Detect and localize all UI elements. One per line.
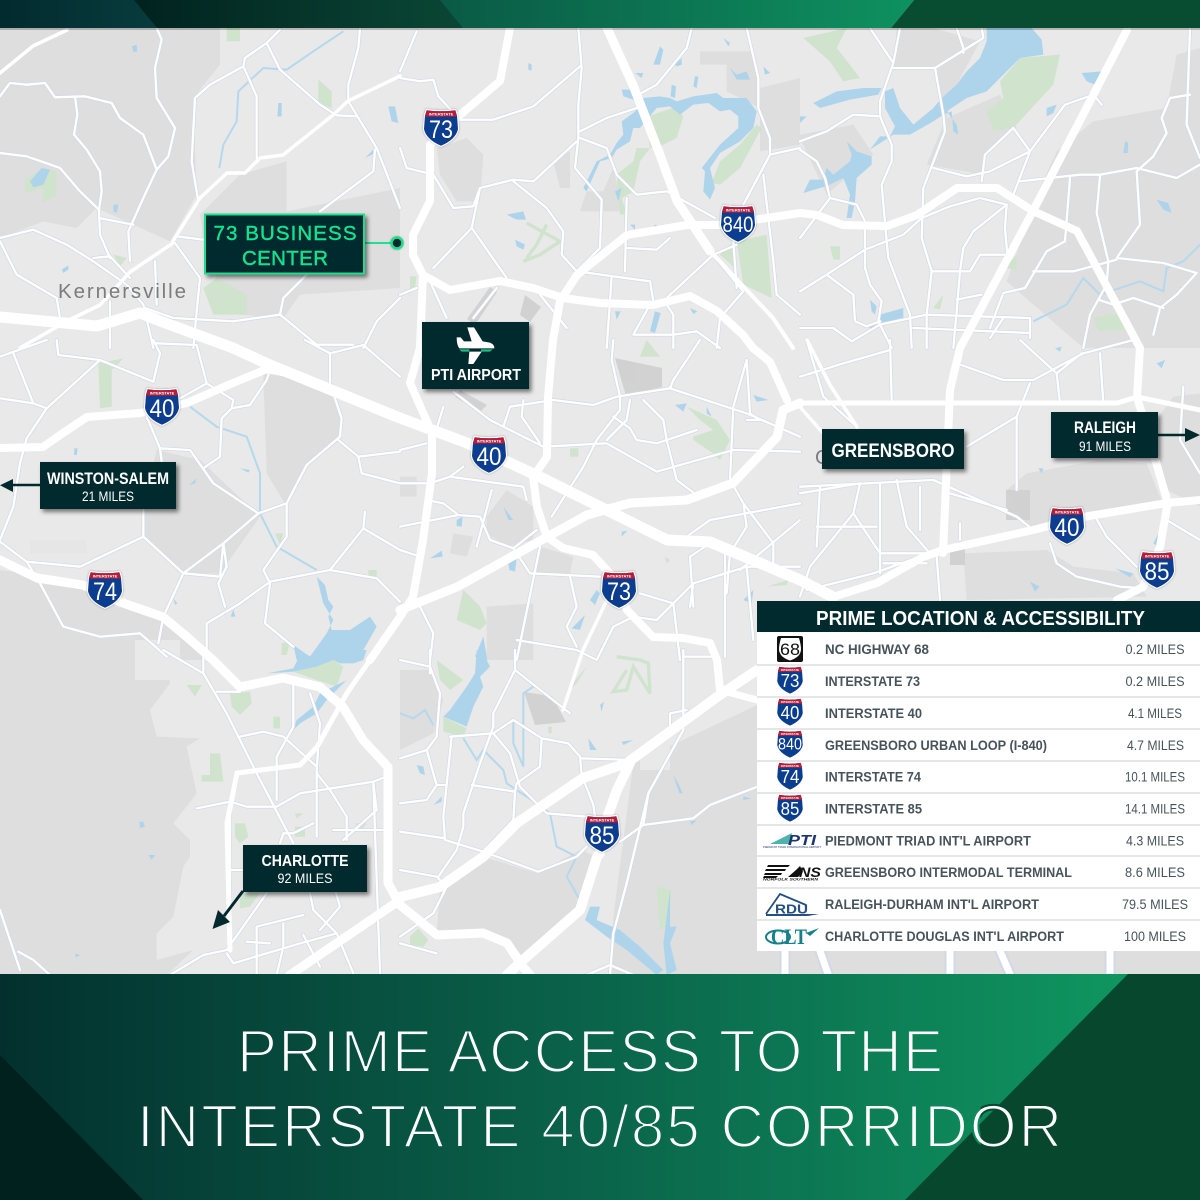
interstate shield 85 east: INTERSTATE [1145,554,1170,559]
icon: shield 840 [776,730,804,758]
row: Interstate 85: INTERSTATE 85 [825,802,922,816]
interstate shield 40 central: INTERSTATE [477,439,502,444]
row: NC Highway 68: NC HIGHWAY 68 [825,642,929,657]
interstate shield 40 east: 40 [1054,514,1080,542]
icon: highway 68 [777,636,803,662]
row: Piedmont Triad [763,832,1184,849]
row: Interstate 40: 4.1 MILES [1128,706,1182,721]
title [137,1018,1062,1160]
row: Interstate 73: 0.2 MILES [1126,674,1184,689]
icon: highway 68: 68 [780,640,800,659]
interstate shield 40 west: 40 [150,395,174,423]
interstate shield 85 south [584,815,620,853]
header band [0,0,1200,30]
callout: 73 Business Center [205,214,402,274]
icon: PTI logo [763,832,822,849]
row: Intermodal terminal: GREENSBORO INTERMODAL TERMINAL [825,865,1072,880]
interstate shield 73 south [601,571,637,609]
callout: Charlotte: CHARLOTTE [262,853,349,870]
row: Charlotte Douglas: 100 MILES [1124,929,1186,944]
row: Greensboro Urban Loop: GREENSBORO URBAN LOOP (I-840) [825,738,1047,753]
arrow: southwest [212,910,230,929]
icon: Norfolk Southern logo [763,864,822,882]
interstate shield 73 north [423,109,459,147]
icon: shield 74 [776,762,804,790]
icon: shield 74: 74 [781,766,799,787]
roads [0,28,1200,975]
icon: airplane [457,327,494,364]
interstate shield 73 north: 73 [429,116,453,144]
row: Interstate 73 [776,666,1184,694]
water [30,28,1172,975]
callout: Winston-Salem: 21 MILES [82,488,134,504]
icon: shield 73: 73 [781,670,799,691]
row: Interstate 74 [776,762,1185,790]
interstate shield 840: 840 [722,212,754,237]
row: Interstate 85: 14.1 MILES [1125,802,1185,816]
interstate shield 85 south: 85 [590,822,614,850]
callout: Winston-Salem: WINSTON-SALEM [47,470,169,488]
footer band [0,974,1200,1200]
icon: PTI logo: PIEDMONT TRIAD INTERNATIONAL AIRPORT [763,846,822,849]
interstate shield 85 south: INTERSTATE [590,818,615,823]
row: NC Highway 68: 0.2 MILES [1126,642,1184,657]
place label: Greensboro (masked): G [815,447,831,469]
table heading [757,601,1200,632]
row: Interstate 40 [776,698,1182,726]
callout: Raleigh: RALEIGH [1074,419,1136,437]
callout: Greensboro: GREENSBORO [832,440,954,462]
row: Interstate 85 [776,794,1185,822]
icon: shield 840: INTERSTATE [781,732,799,736]
arrow: east [1185,428,1200,442]
interstate shield 40 west [144,388,180,426]
icon: RDU logo [766,894,819,916]
icon: shield 85 [776,794,804,822]
icon: Norfolk Southern logo: NORFOLK SOUTHERN [763,878,819,882]
icon: shield 73: INTERSTATE [781,668,799,672]
map background [0,28,1200,976]
table heading: PRIME LOCATION & ACCESSIBILITY [816,608,1146,630]
row: NC Highway 68 [777,636,1184,662]
callout: Raleigh [1051,412,1200,458]
callout: 73 Business Center: 73 BUSINESS [214,222,356,245]
icon: shield 85: INTERSTATE [781,796,799,800]
panel: prime location and accessibility [757,601,1200,951]
callout: PTI Airport: PTI AIRPORT [431,367,521,384]
icon: PTI logo: PTI [788,832,817,849]
row: Interstate 74: 10.1 MILES [1125,770,1185,784]
interstate shield 40 east [1049,507,1085,545]
parks [25,28,1128,947]
icon: shield 40 [776,698,804,726]
callout: Winston-Salem [0,462,176,509]
callout: PTI Airport [422,322,529,389]
interstate shield 40 central: 40 [476,443,502,471]
interstate shield 74: INTERSTATE [93,574,118,579]
interstate shield 40 west: INTERSTATE [150,391,175,396]
row: Intermodal terminal: 8.6 MILES [1125,865,1185,880]
row: Interstate 74: INTERSTATE 74 [825,770,921,784]
airport grounds [455,287,1030,725]
title: INTERSTATE 40/85 CORRIDOR [137,1093,1062,1160]
arrow: west [0,479,13,492]
interstate shield 74: 74 [93,578,117,606]
row: Charlotte Douglas [766,924,1186,949]
icon: shield 73 [776,666,804,694]
interstate shield 840 [720,205,756,243]
callout: Charlotte [212,845,367,929]
row: Interstate 40: INTERSTATE 40 [825,706,922,721]
row: Piedmont Triad: 4.3 MILES [1126,834,1184,848]
callout: Greensboro [822,429,964,469]
interstate shield 73 south: 73 [607,578,631,606]
row: Charlotte Douglas: CHARLOTTE DOUGLAS INT'L AIRPORT [825,929,1065,944]
row: Piedmont Triad: PIEDMONT TRIAD INT'L AIRPORT [825,834,1032,848]
interstate shield 840: INTERSTATE [726,208,751,213]
callout: 73 Business Center: CENTER [242,247,328,270]
interstate shield 85 east [1139,551,1175,589]
icon: shield 85: 85 [781,798,799,819]
row: Raleigh-Durham: 79.5 MILES [1122,897,1188,912]
row: Intermodal terminal [763,864,1185,882]
icon: shield 40: 40 [781,702,799,723]
place label: Kernersville: Kernersville [58,280,186,303]
icon: shield 74: INTERSTATE [781,764,799,768]
interstate shield 40 central [471,436,507,474]
row: Raleigh-Durham: RALEIGH-DURHAM INT'L AIRPORT [825,897,1040,912]
callout: Charlotte: 92 MILES [278,870,332,886]
interstate shield 74 [87,571,123,609]
interstate shield 40 east: INTERSTATE [1055,510,1080,515]
icon: CLT logo: CLT [771,924,807,949]
icon: shield 840: 840 [778,736,802,754]
callout: Raleigh: 91 MILES [1079,438,1131,454]
icon: RDU logo: RDU [775,902,808,916]
interstate shield 85 east: 85 [1144,558,1170,586]
title: PRIME ACCESS TO THE [237,1018,943,1085]
icon: Norfolk Southern logo: NS [799,864,822,880]
row: Raleigh-Durham [766,894,1188,916]
row: Interstate 73: INTERSTATE 73 [825,674,920,689]
interstate shield 73 south: INTERSTATE [607,574,632,579]
row: Greensboro Urban Loop [776,730,1184,758]
icon: shield 40: INTERSTATE [781,700,799,704]
interstate shield 73 north: INTERSTATE [429,112,454,117]
row: Greensboro Urban Loop: 4.7 MILES [1127,738,1184,753]
